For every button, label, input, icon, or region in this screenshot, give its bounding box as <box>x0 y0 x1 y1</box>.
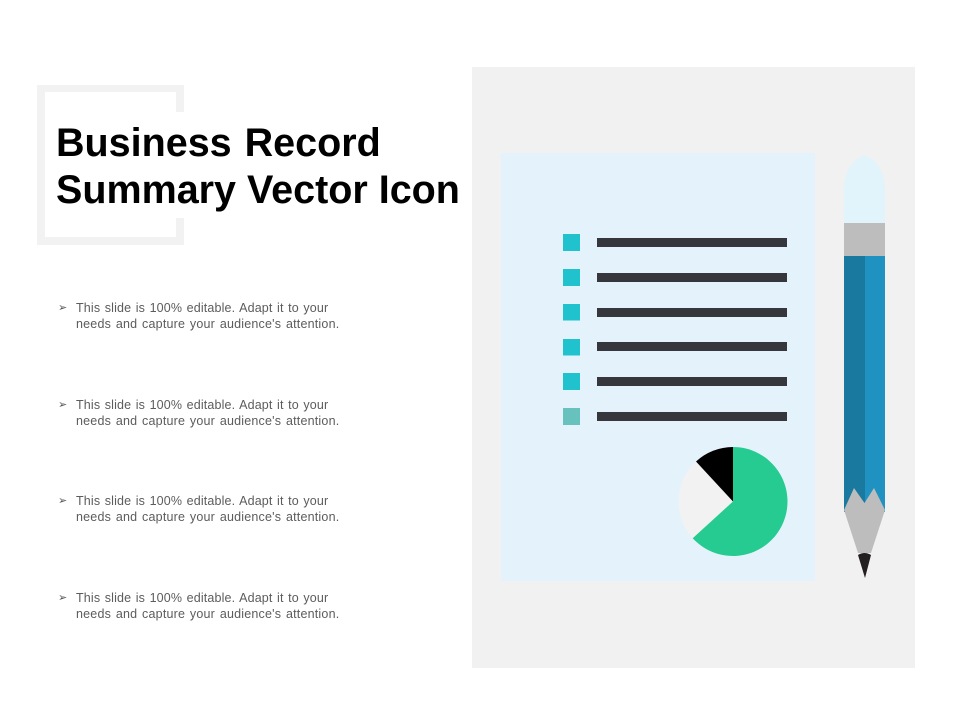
bullet text 3: This slide is 100% editable. Adapt it to your <box>76 494 328 508</box>
bullet text 2: This slide is 100% editable. Adapt it to your <box>76 398 328 412</box>
bullet text 2: needs and capture your audience's attention. <box>76 414 339 428</box>
bullet text 1: ➢ <box>58 301 67 314</box>
checklist <box>563 234 787 425</box>
bullet text 4: This slide is 100% editable. Adapt it to your <box>76 591 328 605</box>
bullet text 2: ➢ <box>58 398 67 411</box>
title: Business Record <box>56 121 381 165</box>
icon: pencil <box>844 156 885 578</box>
bullet text 3: needs and capture your audience's attention. <box>76 510 339 524</box>
bullet text 1: This slide is 100% editable. Adapt it to your <box>76 301 328 315</box>
bullet text 4: ➢ <box>58 591 67 604</box>
bullet text 1: needs and capture your audience's attention. <box>76 317 339 331</box>
document page <box>501 153 815 581</box>
bullet text 3: ➢ <box>58 494 67 507</box>
pie chart <box>678 447 788 556</box>
bullet text 1 <box>58 301 339 331</box>
panel: illustration background <box>472 67 915 668</box>
title: Summary Vector Icon <box>56 168 460 212</box>
bullet text 2 <box>58 398 339 428</box>
bullet text 3 <box>58 494 339 524</box>
title <box>56 121 460 212</box>
bullet text 4: needs and capture your audience's attention. <box>76 607 339 621</box>
bullet text 4 <box>58 591 339 621</box>
title bracket frame <box>37 85 184 245</box>
